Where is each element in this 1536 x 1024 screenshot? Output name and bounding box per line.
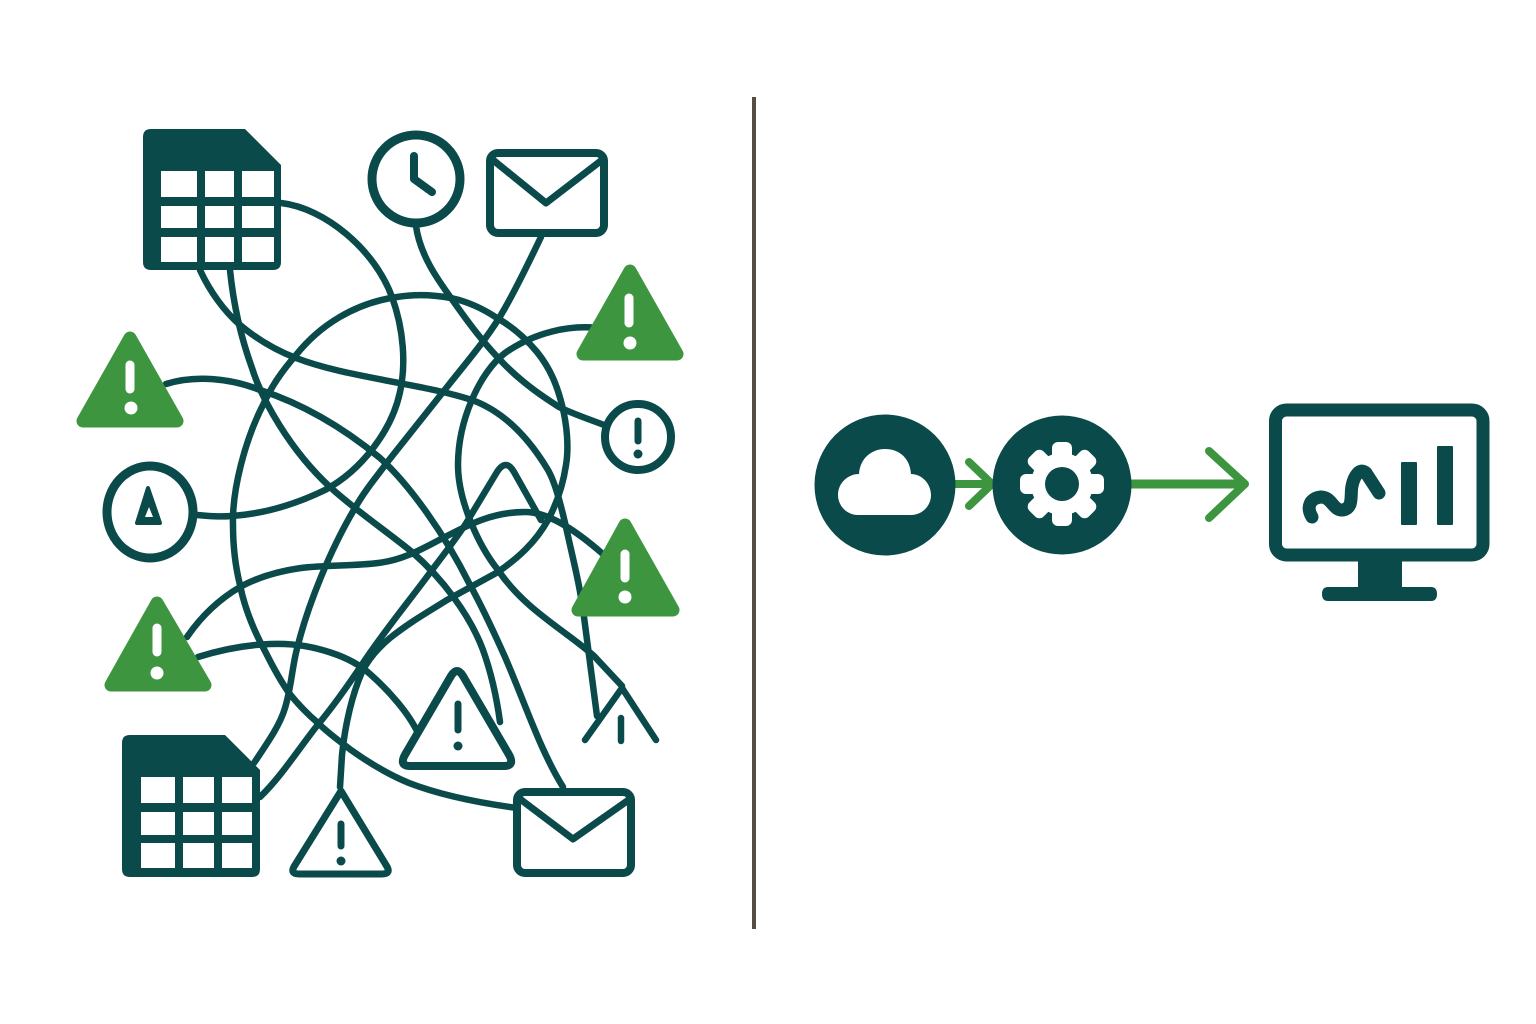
tangled connector lines xyxy=(166,203,622,808)
icon: gear in circle xyxy=(992,416,1132,554)
icon: dashboard monitor xyxy=(1276,410,1483,601)
arrow: cloud to gear xyxy=(955,462,992,506)
chart: bars xyxy=(1401,446,1453,525)
icon: outline warning center xyxy=(403,671,511,766)
arrow: gear to monitor xyxy=(1131,451,1245,518)
icon: cloud in circle xyxy=(814,414,956,556)
icon: outline warning bottom xyxy=(293,791,388,874)
icon: green warning bottom left xyxy=(111,603,205,685)
panel: streamlined automated flow xyxy=(814,410,1483,601)
icon: green warning left xyxy=(83,338,177,421)
icon: envelope top xyxy=(490,153,604,233)
icon: green warning top right xyxy=(583,271,677,354)
icon: warning circle with triangle xyxy=(107,466,193,558)
divider xyxy=(752,97,756,929)
panel: tangled manual process xyxy=(83,129,677,877)
chart: squiggle line xyxy=(1309,471,1379,517)
broken warning triangle outline xyxy=(585,688,656,741)
icon: envelope bottom xyxy=(517,792,631,873)
icon: spreadsheet top xyxy=(143,129,281,270)
icon: clock xyxy=(372,135,460,223)
icon: spreadsheet bottom xyxy=(122,735,260,877)
icon: green warning right xyxy=(578,525,673,610)
icon: alert circle xyxy=(605,404,671,470)
